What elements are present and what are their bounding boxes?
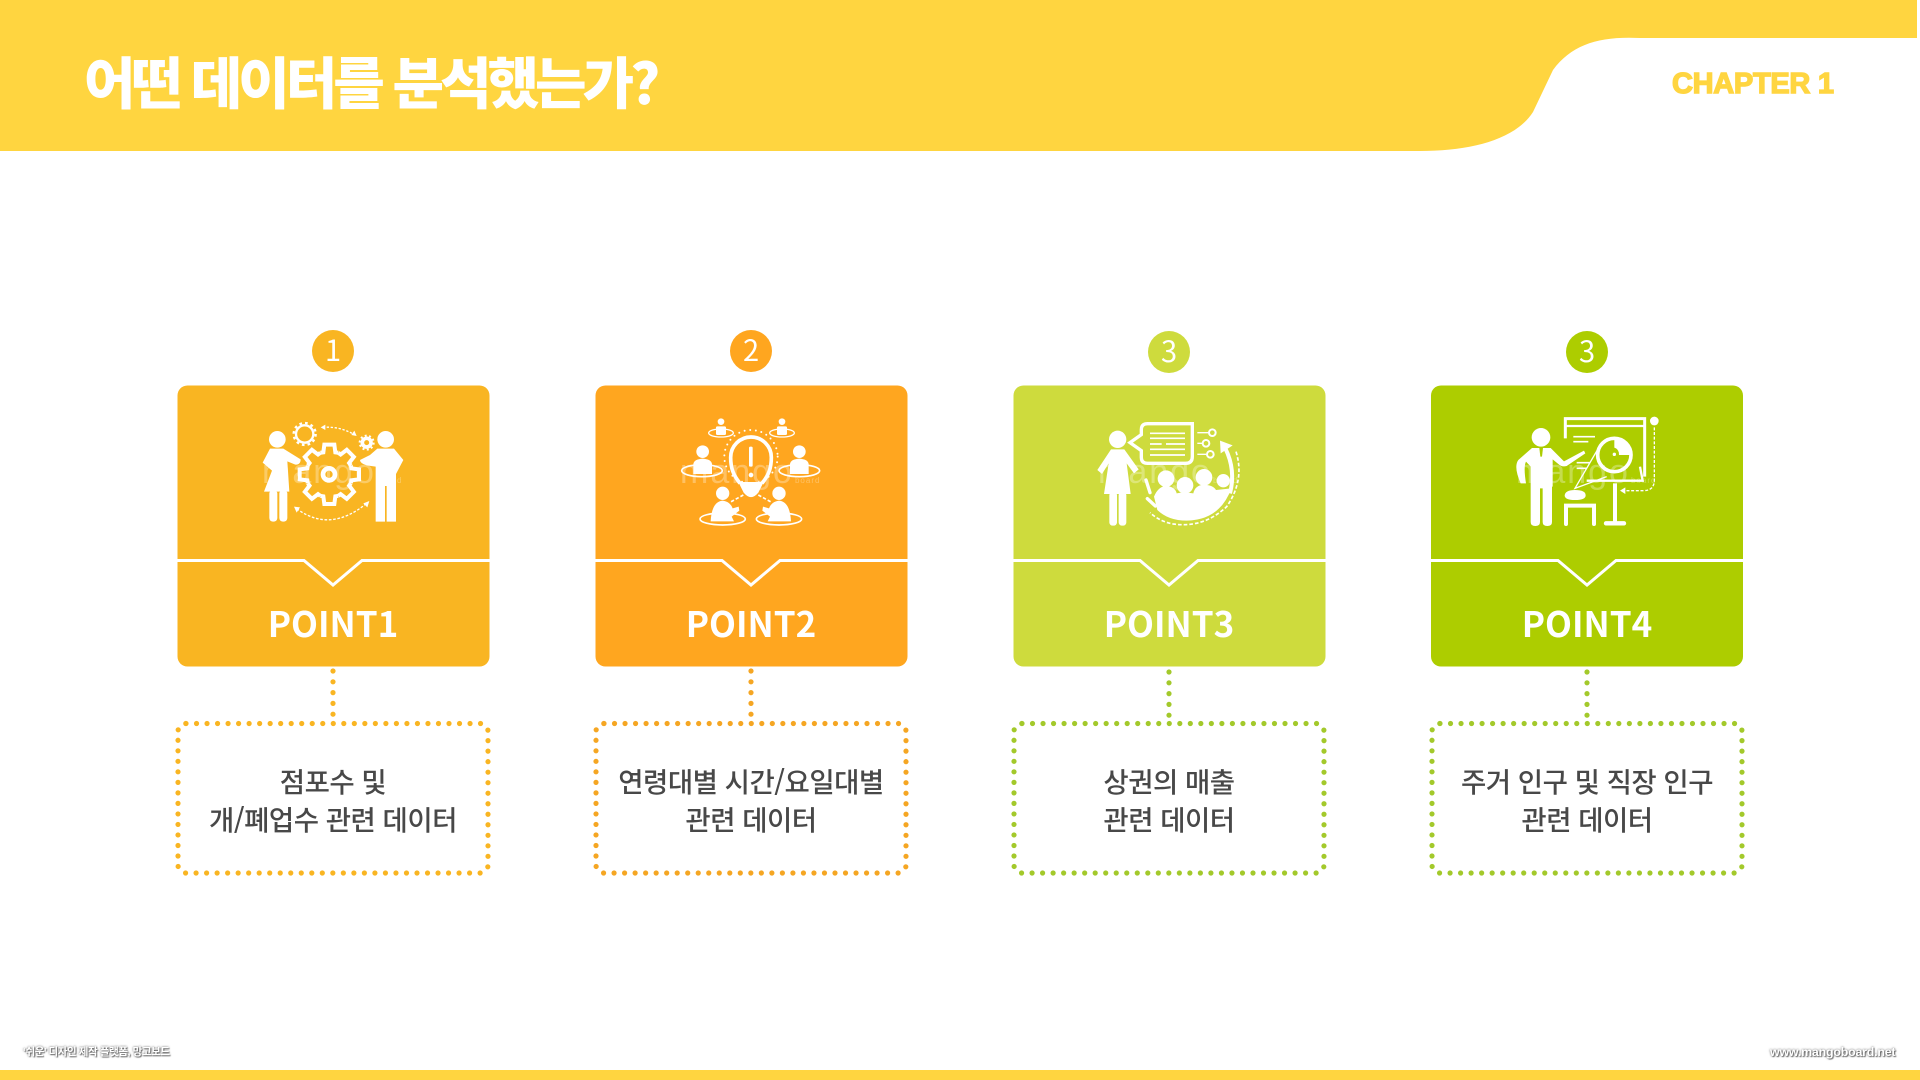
panel: point 2	[596, 328, 908, 873]
description 1: 점포수 및	[280, 760, 386, 800]
label point1: POINT1	[268, 597, 398, 648]
connector 3	[1166, 672, 1172, 717]
divider chevron 1	[178, 560, 490, 585]
label point2: POINT2	[686, 597, 816, 648]
footer url right: www.mangoboard.net	[1770, 1045, 1895, 1059]
number badge 3	[1148, 329, 1190, 373]
divider chevron 3	[1014, 560, 1326, 585]
card 4	[1431, 386, 1743, 666]
icon: presenter at board	[1516, 417, 1659, 526]
description 3: 상권의 매출	[1103, 760, 1235, 800]
dotted box 2	[596, 724, 906, 873]
number badge 4: 3	[1579, 329, 1595, 371]
connector 1	[330, 671, 336, 717]
description 1: 개/폐업수 관련 데이터	[209, 798, 457, 838]
card 2	[596, 386, 908, 666]
dotted box 1	[178, 724, 488, 873]
dotted box 4	[1432, 724, 1742, 873]
panel: point 3	[1014, 329, 1326, 873]
panel: point 1	[178, 328, 490, 873]
chapter label: CHAPTER 1	[1672, 68, 1834, 100]
icon: presenter and audience	[1097, 424, 1239, 526]
divider chevron 4	[1431, 560, 1743, 585]
number badge 3: 3	[1161, 329, 1177, 371]
number badge 1: 1	[325, 328, 341, 370]
label point4: POINT4	[1522, 597, 1652, 648]
watermark 1: mangoboard	[262, 453, 402, 491]
footer credit left: ‘쉬운’ 디자인 제작 플랫폼, 망고보드	[23, 1046, 170, 1058]
card 3	[1014, 386, 1326, 666]
description 3: 관련 데이터	[1103, 798, 1235, 838]
connector 2	[748, 671, 754, 717]
number badge 1	[312, 328, 354, 372]
watermark 3: mangoboard	[1098, 453, 1238, 491]
number badge 4	[1566, 329, 1608, 373]
title: 어떤 데이터를 분석했는가?	[84, 40, 658, 121]
icon: people and gears	[263, 423, 403, 522]
label point3: POINT3	[1104, 597, 1234, 648]
divider chevron 2	[596, 560, 908, 585]
panel: point 4	[1431, 329, 1743, 873]
description 4: 주거 인구 및 직장 인구	[1461, 760, 1713, 800]
dotted box 3	[1014, 724, 1324, 873]
card 1	[178, 386, 490, 666]
watermark 4: mangoboard	[1516, 453, 1656, 491]
number badge 2	[730, 328, 772, 372]
description 4: 관련 데이터	[1521, 798, 1653, 838]
description 2: 관련 데이터	[685, 798, 817, 838]
description 2: 연령대별 시간/요일대별	[618, 760, 884, 800]
number badge 2: 2	[743, 328, 759, 370]
header band	[0, 0, 1917, 151]
icon: idea bulb and people	[682, 418, 820, 525]
bottom bar	[0, 1070, 1920, 1080]
connector 4	[1584, 672, 1590, 717]
watermark 2: mangoboard	[680, 453, 820, 491]
